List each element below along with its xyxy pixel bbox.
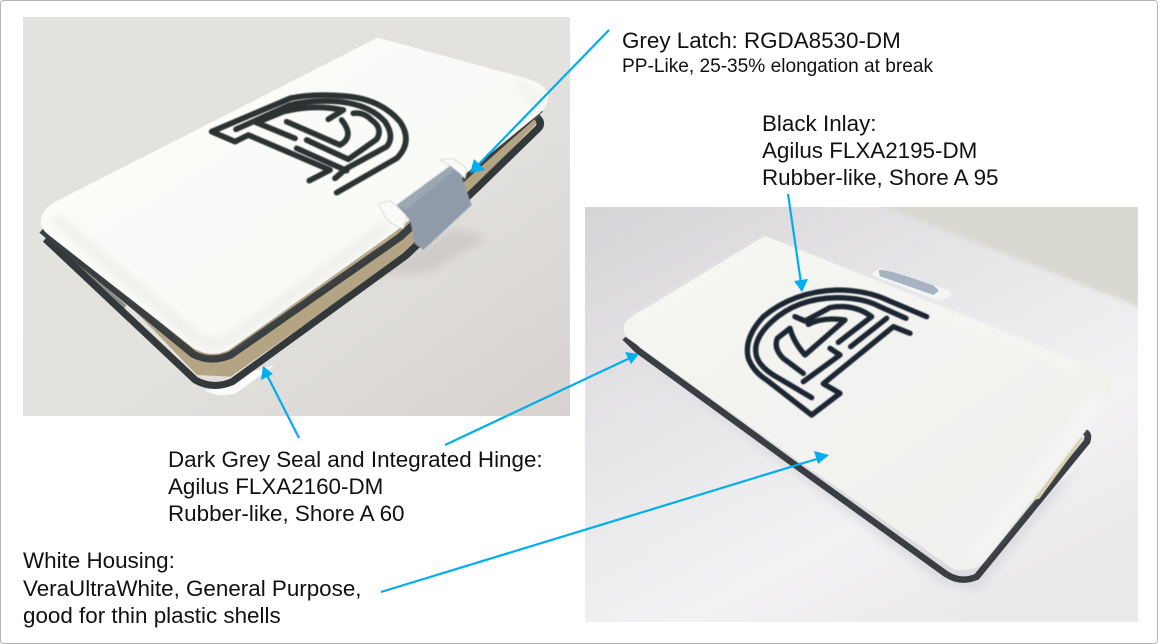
callout: grey latch: Grey Latch: RGDA8530-DM <box>622 28 901 53</box>
photo: left device with latch <box>23 17 570 416</box>
callout: white housing <box>23 548 362 628</box>
callout: black inlay <box>762 111 998 190</box>
callout: black inlay: Agilus FLXA2195-DM <box>762 138 977 163</box>
arrow: white housing callout <box>381 451 829 592</box>
callout: black inlay: Black Inlay: <box>762 111 876 136</box>
callout: white housing: White Housing: <box>23 548 175 573</box>
callout: dark grey seal and hinge: Dark Grey Seal and Integrated Hinge: <box>168 447 543 472</box>
arrow: seal callout to right device <box>445 352 639 445</box>
arrow: seal callout to left device <box>261 366 299 438</box>
callout: dark grey seal and hinge: Agilus FLXA2160-DM <box>168 474 383 499</box>
callout: white housing: VeraUltraWhite, General Purpose, <box>23 576 362 601</box>
callout: dark grey seal and hinge: Rubber-like, Shore A 60 <box>168 501 404 526</box>
callout: grey latch: PP-Like, 25-35% elongation at break <box>622 56 933 77</box>
logo: left inlay <box>212 95 406 193</box>
callout: black inlay: Rubber-like, Shore A 95 <box>762 165 998 190</box>
arrow: grey latch callout <box>470 30 609 173</box>
callout: dark grey seal and hinge <box>168 447 543 526</box>
arrow: black inlay callout <box>788 194 808 292</box>
latch: grey clip with white pins <box>378 158 472 250</box>
logo: right inlay <box>747 290 927 415</box>
callout: white housing: good for thin plastic shells <box>23 603 281 628</box>
back wall <box>886 207 1138 308</box>
callout: grey latch <box>622 28 933 77</box>
rear latch <box>871 268 952 302</box>
photo: right device angled view <box>585 192 1158 622</box>
